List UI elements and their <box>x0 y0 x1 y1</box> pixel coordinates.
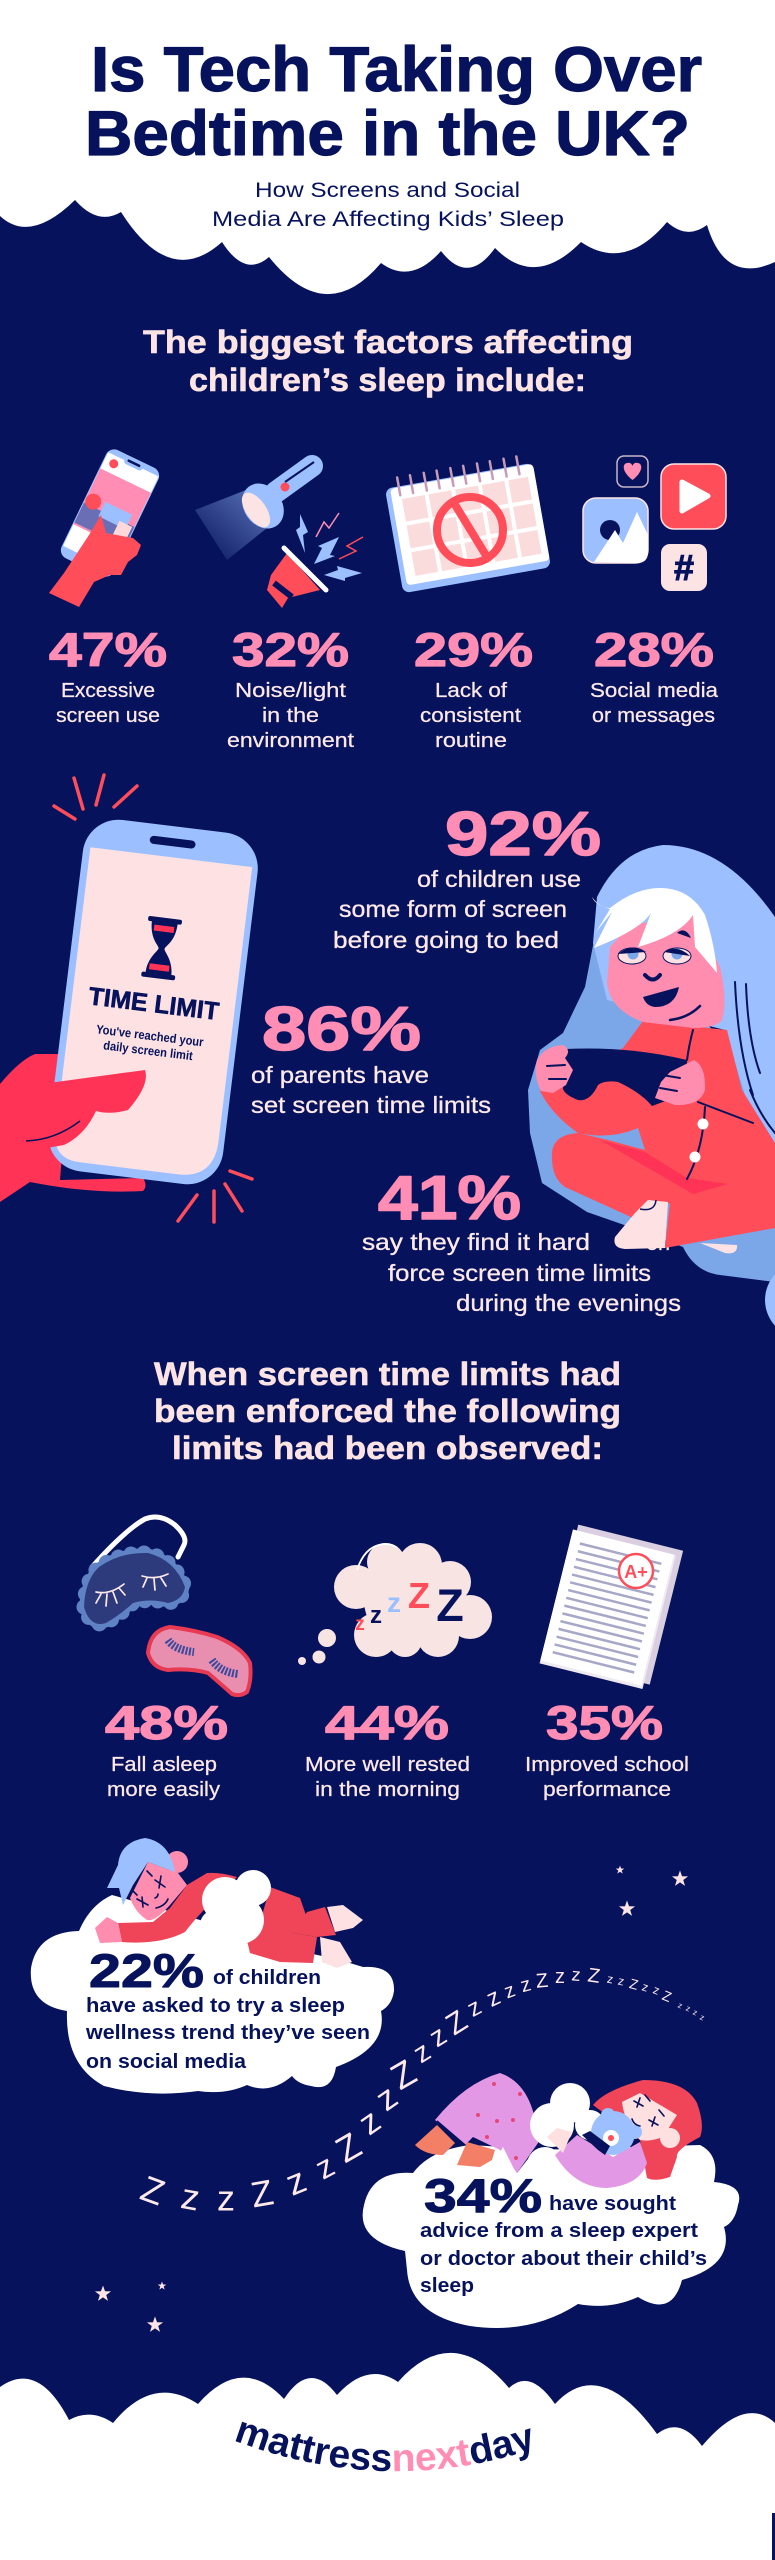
z trail: z <box>369 2078 405 2119</box>
subtitle: Media Are Affecting Kids’ Sleep <box>212 208 564 231</box>
z trail: Z <box>135 2167 170 2213</box>
z trail: z <box>280 2159 312 2203</box>
heading: when limits enforced: When screen time limits had <box>154 1356 621 1392</box>
title <box>85 35 702 169</box>
sleeping child <box>95 1838 363 1968</box>
panel: cloud 34% <box>363 2073 739 2328</box>
title: Is Tech Taking Over <box>91 35 702 105</box>
z trail: z <box>501 1979 518 2003</box>
34% text: advice from a sleep expert <box>420 2220 698 2242</box>
z trail: z <box>352 2102 388 2143</box>
stat: 29% lack of routine: 29% <box>414 623 533 676</box>
z trail: z <box>482 1983 505 2013</box>
z trail: z <box>571 1964 581 1985</box>
stat: 41% hard to enforce: 41% <box>378 1164 521 1233</box>
22% text: 22% <box>89 1944 204 1997</box>
icon: thought cloud with z's: Z <box>408 1575 430 1616</box>
stat: 92% use screens <box>333 800 601 953</box>
z trail: z <box>606 1972 614 1987</box>
stat: 41% hard to enforce: say they find it hard <box>362 1229 590 1255</box>
z trail: Z <box>328 2124 368 2171</box>
icon: thought cloud with z's: z <box>355 1614 365 1635</box>
stat: 29% lack of routine: consistent <box>420 705 521 727</box>
stat: 47% excessive screen use <box>49 623 167 727</box>
34% text: sleep <box>420 2275 474 2297</box>
panel: cloud 22% <box>31 1838 394 2094</box>
34% text: have sought <box>549 2193 676 2215</box>
z trail: Z <box>586 1964 601 1988</box>
z trail: z <box>684 2004 692 2014</box>
z trail: z <box>309 2147 340 2186</box>
stat: 28% social media: or messages <box>592 705 715 727</box>
stat: 86% set limits: of parents have <box>251 1062 429 1088</box>
stars: upper right <box>616 1866 688 1916</box>
stat: 92% use screens: some form of screen <box>339 896 567 922</box>
z trail: Z <box>248 2171 276 2216</box>
stat: 86% set limits <box>251 995 491 1118</box>
z trail: z <box>698 2013 706 2023</box>
stat: 86% set limits: set screen time limits <box>251 1092 491 1118</box>
z trail: Z <box>440 2004 473 2042</box>
logo: mattressnextday <box>236 2422 530 2472</box>
34% text: or doctor about their child’s <box>420 2248 707 2270</box>
34% text <box>420 2169 707 2297</box>
sleeping child with teddy <box>415 2073 702 2188</box>
heading: when limits enforced: been enforced the following <box>154 1393 621 1429</box>
subtitle <box>212 179 564 231</box>
stat: 92% use screens: of children use <box>417 866 581 892</box>
icon: phone in hand <box>49 446 162 607</box>
z trail: z <box>178 2175 203 2219</box>
z trail: z <box>408 2035 436 2069</box>
stat: 32% noise/light: Noise/light <box>235 680 347 702</box>
stat: 44% well rested: 44% <box>325 1696 449 1749</box>
heading: when limits enforced: limits had been observed: <box>172 1430 603 1466</box>
stat: 92% use screens: before going to bed <box>333 927 559 953</box>
icon: graded paper <box>540 1524 683 1690</box>
stat: 29% lack of routine: routine <box>435 730 507 752</box>
stat: 48% fall asleep: Fall asleep <box>111 1754 217 1776</box>
stat: 41% hard to enforce: force screen time limits <box>388 1260 651 1286</box>
icon: social media tiles <box>583 456 726 591</box>
illustration: time limit phone in hand: daily screen limit <box>103 1038 194 1063</box>
illustration: time limit phone in hand: You've reached your <box>95 1022 204 1049</box>
22% text: of children <box>213 1967 321 1989</box>
z trail: z <box>424 2019 452 2053</box>
cloud shape <box>31 1895 394 2094</box>
22% text: have asked to try a sleep <box>86 1995 345 2017</box>
22% text <box>85 1944 370 2073</box>
illustration: girl gaming <box>528 845 775 1338</box>
icon: sleep masks <box>84 1517 251 1695</box>
stars: lower left <box>95 2282 166 2332</box>
stat: 41% hard to enforce: during the evenings <box>456 1290 681 1316</box>
icon: thought cloud with z's: Z <box>436 1580 464 1631</box>
z trail: z <box>463 1993 486 2023</box>
stat: 35% school performance <box>525 1696 689 1801</box>
stat: 32% noise/light: in the <box>262 705 319 727</box>
stat: 47% excessive screen use: Excessive <box>61 680 155 702</box>
heading: biggest factors <box>143 324 633 398</box>
22% text: on social media <box>86 2051 247 2073</box>
z trail: z <box>676 2001 684 2011</box>
cloud shape <box>363 2145 739 2328</box>
footer cloud <box>0 2353 775 2560</box>
stat: 32% noise/light: environment <box>227 730 355 752</box>
stat: 48% fall asleep: 48% <box>105 1696 228 1749</box>
stat: 32% noise/light <box>227 623 355 752</box>
icon: graded paper: A+ <box>624 1562 648 1582</box>
icon: social media tiles: # <box>674 547 694 588</box>
icon: thought cloud with z's: z <box>370 1602 382 1629</box>
heading: when limits enforced <box>154 1356 621 1466</box>
z trail: Z <box>535 1970 549 1993</box>
34% text: 34% <box>424 2169 542 2222</box>
icon: thought cloud with z's <box>298 1543 492 1665</box>
stat: 48% fall asleep: more easily <box>107 1779 220 1801</box>
z trail: z <box>617 1974 626 1989</box>
z trail: z <box>651 1983 662 1998</box>
stat: 44% well rested: More well rested <box>305 1754 470 1776</box>
heading: biggest factors: children’s sleep include: <box>189 362 586 398</box>
stat: 48% fall asleep <box>105 1696 228 1801</box>
z trail: z <box>518 1973 533 1997</box>
illustration: time limit phone in hand: TIME LIMIT <box>87 982 220 1026</box>
z trail: z <box>555 1966 565 1988</box>
logo <box>236 2422 530 2472</box>
stat: 28% social media: Social media <box>590 680 719 702</box>
z trail: z <box>691 2008 699 2018</box>
heading: biggest factors: The biggest factors affecting <box>143 324 633 360</box>
stat: 35% school performance: 35% <box>546 1696 663 1749</box>
stat: 29% lack of routine <box>414 623 533 752</box>
stat: 28% social media <box>590 623 719 727</box>
z trail: z <box>640 1980 650 1995</box>
icon: torch and megaphone <box>195 462 363 608</box>
stat: 41% hard to enforce <box>362 1164 681 1316</box>
22% text: wellness trend they’ve seen <box>85 2022 370 2044</box>
z trail: Z <box>660 1987 674 2005</box>
stat: 35% school performance: performance <box>543 1779 671 1801</box>
icon: calendar with prohibition sign <box>383 454 551 593</box>
z trail: z <box>217 2177 235 2218</box>
z trail: Z <box>628 1975 641 1993</box>
stat: 44% well rested <box>305 1696 470 1801</box>
stat: 44% well rested: in the morning <box>315 1779 460 1801</box>
header cloud <box>0 0 775 294</box>
z trail: Z <box>383 2051 423 2098</box>
stat: 28% social media: 28% <box>594 623 714 676</box>
hidden text fragment behind foot: en <box>646 1229 670 1255</box>
stat: 47% excessive screen use: screen use <box>56 705 160 727</box>
stat: 92% use screens: 92% <box>445 800 601 869</box>
stat: 86% set limits: 86% <box>262 995 421 1064</box>
stat: 29% lack of routine: Lack of <box>435 680 507 702</box>
icon: thought cloud with z's: z <box>387 1587 401 1618</box>
stat: 47% excessive screen use: 47% <box>49 623 167 676</box>
illustration: time limit phone in hand <box>0 775 262 1222</box>
title: Bedtime in the UK? <box>85 99 690 169</box>
subtitle: How Screens and Social <box>255 179 520 202</box>
stat: 32% noise/light: 32% <box>232 623 349 676</box>
stat: 35% school performance: Improved school <box>525 1754 689 1776</box>
z trail <box>135 1964 706 2219</box>
